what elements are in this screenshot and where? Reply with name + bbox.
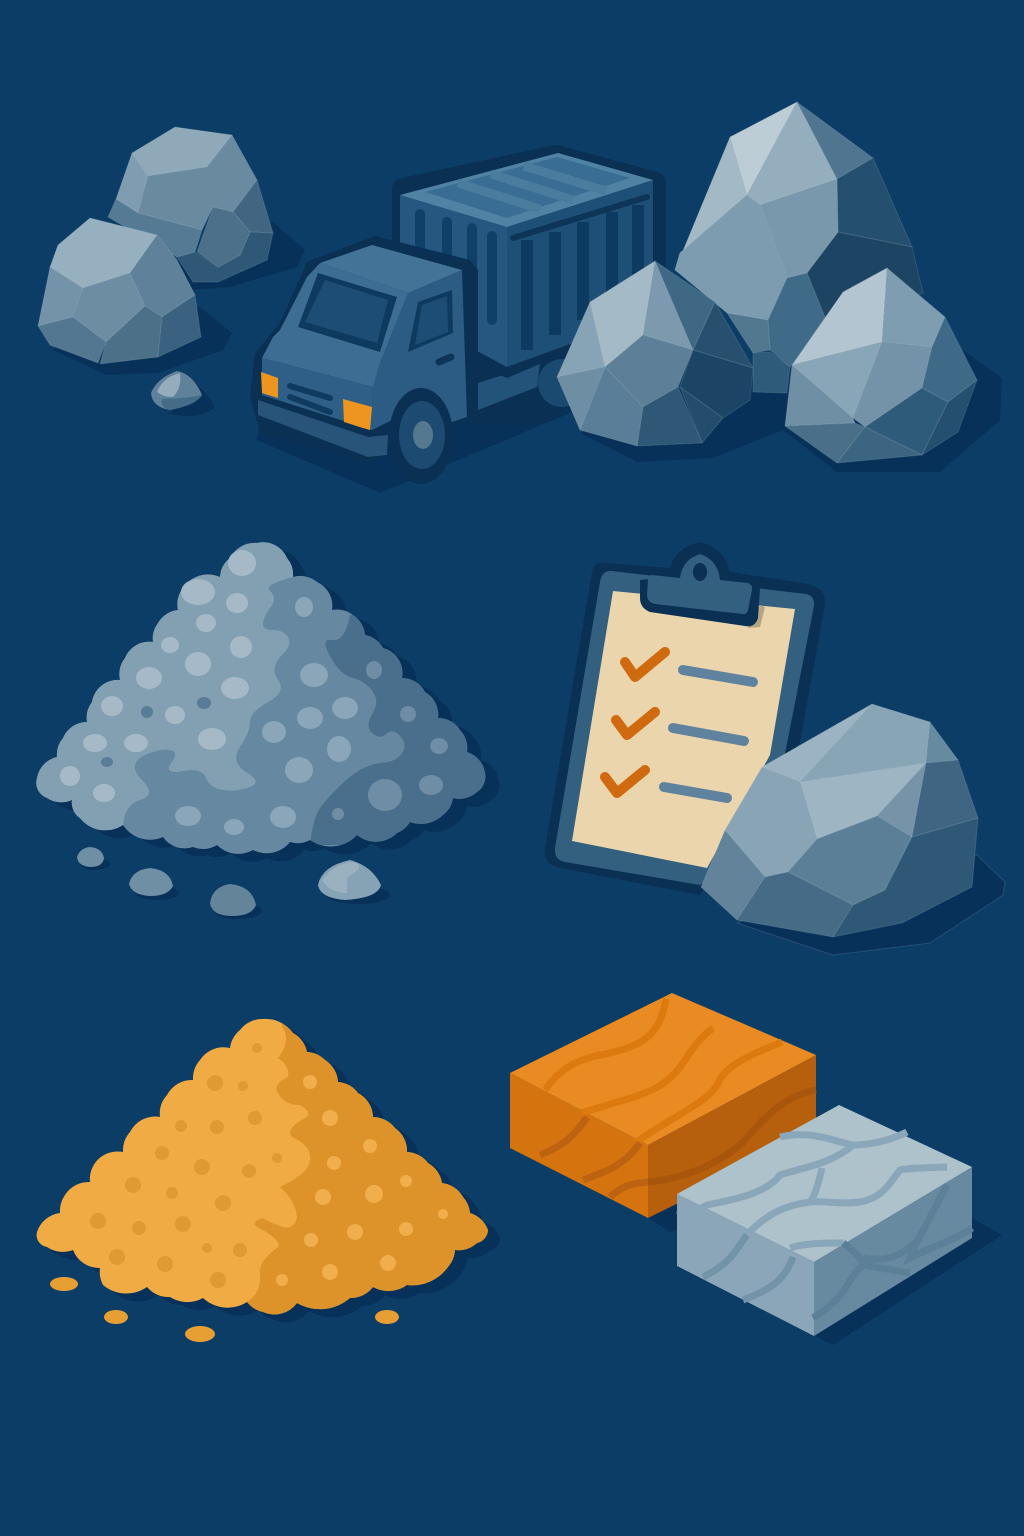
icon: gravel pile <box>20 535 500 862</box>
paper <box>572 591 795 868</box>
icon: two boulders top left <box>38 127 305 375</box>
checklist rows <box>605 652 753 798</box>
icon: boulder group top right <box>557 102 1002 472</box>
clip <box>640 542 765 628</box>
icon: grey veined block <box>677 1105 1002 1345</box>
icon: boulder beside clipboard <box>701 704 1005 955</box>
icon: loose gravel stones <box>77 847 390 919</box>
icon: clipboard with checklist <box>545 542 825 895</box>
rear wheel and chassis <box>470 335 610 425</box>
icon: small pebble <box>151 371 214 416</box>
icon: loose sand grains <box>50 1277 399 1342</box>
icon: sand pile <box>30 1010 500 1322</box>
wheel <box>389 388 453 484</box>
icon: orange veined block <box>510 993 816 1232</box>
cargo container <box>392 145 666 378</box>
cab <box>250 236 478 477</box>
icon: delivery truck <box>250 145 666 493</box>
illustration canvas <box>36 102 1006 1345</box>
